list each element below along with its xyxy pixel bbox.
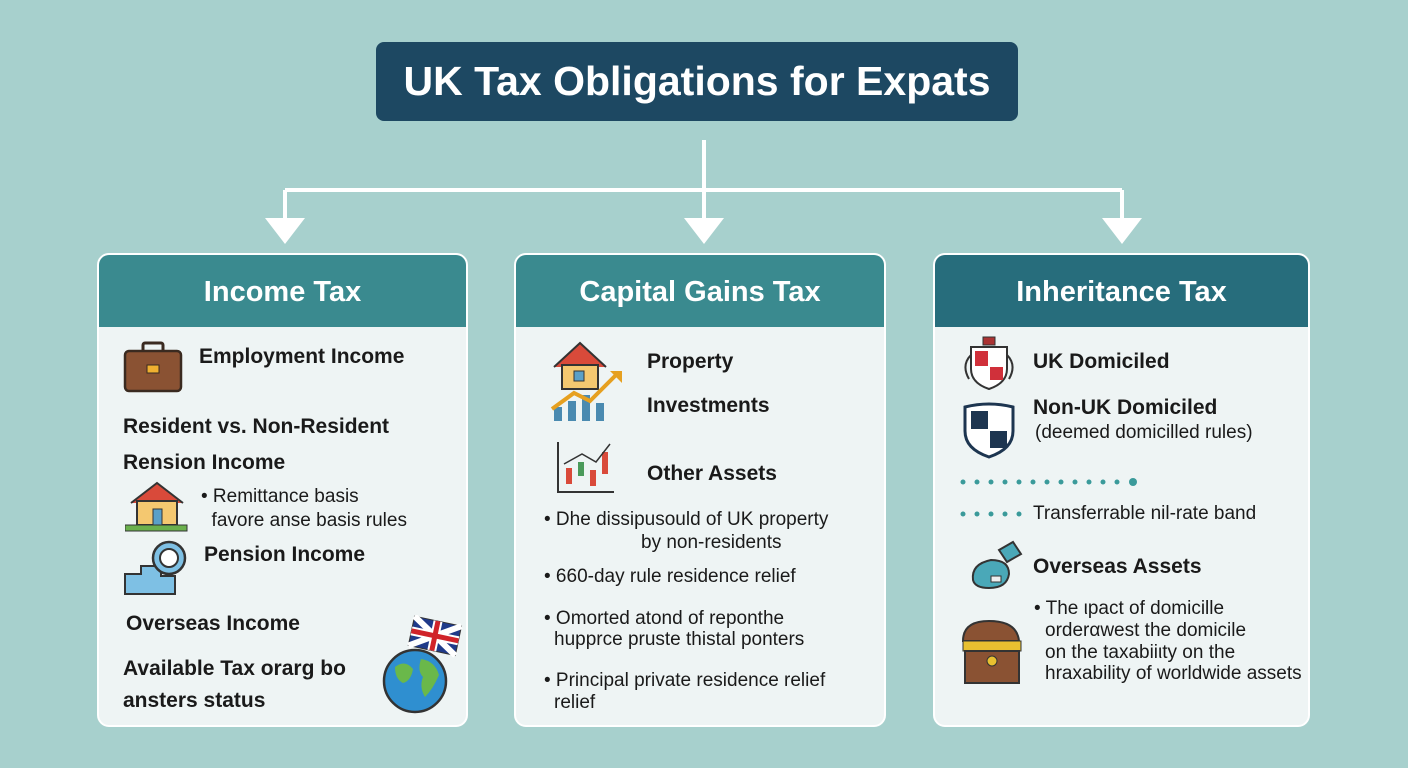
panel: income tax: Pension Income: [204, 543, 365, 566]
panel: inheritance tax: Non-UK Domiciled: [1033, 396, 1217, 419]
panel: income tax: Available Tax orarg bo: [123, 657, 346, 680]
panel: capital gains tax: hupprce pruste thistal ponters: [554, 629, 804, 650]
icon: treasure chest: [962, 620, 1022, 684]
icon: crest: [964, 336, 1014, 390]
title: UK Tax Obligations for Expats: [404, 58, 990, 104]
panel: income tax: [97, 253, 468, 727]
heading: inheritance tax: Inheritance Tax: [1016, 276, 1227, 308]
icon: overseas bag: [972, 540, 1022, 589]
panel: inheritance tax: Transferrable nil-rate band: [1033, 503, 1256, 524]
heading: capital gains tax: [516, 255, 884, 327]
panel: capital gains tax: [514, 253, 886, 727]
panel: income tax: favore anse basis rules: [212, 510, 407, 531]
heading: inheritance tax: [935, 255, 1308, 327]
title: [376, 42, 1018, 121]
icon: globe and UK flag: [382, 615, 462, 714]
panel: inheritance tax: UK Domiciled: [1033, 350, 1170, 373]
panel: capital gains tax: Investments: [647, 394, 770, 417]
panel: capital gains tax: • 660-day rule residence relief: [544, 566, 796, 587]
icon: pension: [124, 540, 186, 595]
panel: capital gains tax: relief: [554, 692, 595, 713]
icon: property growth: [550, 342, 622, 421]
panel: income tax: Employment Income: [199, 345, 404, 368]
icon: briefcase: [124, 342, 182, 392]
panel: capital gains tax: by non-residents: [641, 532, 781, 553]
panel: income tax: • Remittance basis: [201, 486, 359, 507]
panel: inheritance tax: Overseas Assets: [1033, 555, 1202, 578]
panel: inheritance tax: orderαwest the domicile: [1045, 620, 1246, 641]
heading: income tax: [99, 255, 466, 327]
heading: income tax: Income Tax: [204, 276, 361, 308]
panel: inheritance tax: [933, 253, 1310, 727]
panel: inheritance tax: • The ιpact of domicille: [1034, 598, 1224, 619]
panel: income tax: Rension Income: [123, 451, 285, 474]
icon: shield: [964, 402, 1014, 459]
icon: candlestick chart: [557, 442, 614, 493]
panel: inheritance tax: on the taxabiiιty on the: [1045, 642, 1235, 663]
dotted divider: [960, 478, 1137, 516]
panel: capital gains tax: • Dhe dissipusould of UK property: [544, 509, 828, 530]
arrows: connector: [265, 140, 1142, 244]
heading: capital gains tax: Capital Gains Tax: [579, 276, 821, 308]
panel: capital gains tax: Other Assets: [647, 462, 777, 485]
panel: capital gains tax: Property: [647, 350, 733, 373]
panel: capital gains tax: • Omorted atond of reponthe: [544, 608, 784, 629]
panel: income tax: Overseas Income: [126, 612, 300, 635]
panel: income tax: ansters status: [123, 689, 265, 712]
panel: inheritance tax: (deemed domicilled rules): [1035, 422, 1253, 443]
panel: income tax: Resident vs. Non-Resident: [123, 415, 389, 438]
panel: capital gains tax: • Principal private residence relief: [544, 670, 825, 691]
panel: inheritance tax: hraxability of worldwide assets: [1045, 663, 1302, 684]
icon: house: [125, 482, 188, 532]
